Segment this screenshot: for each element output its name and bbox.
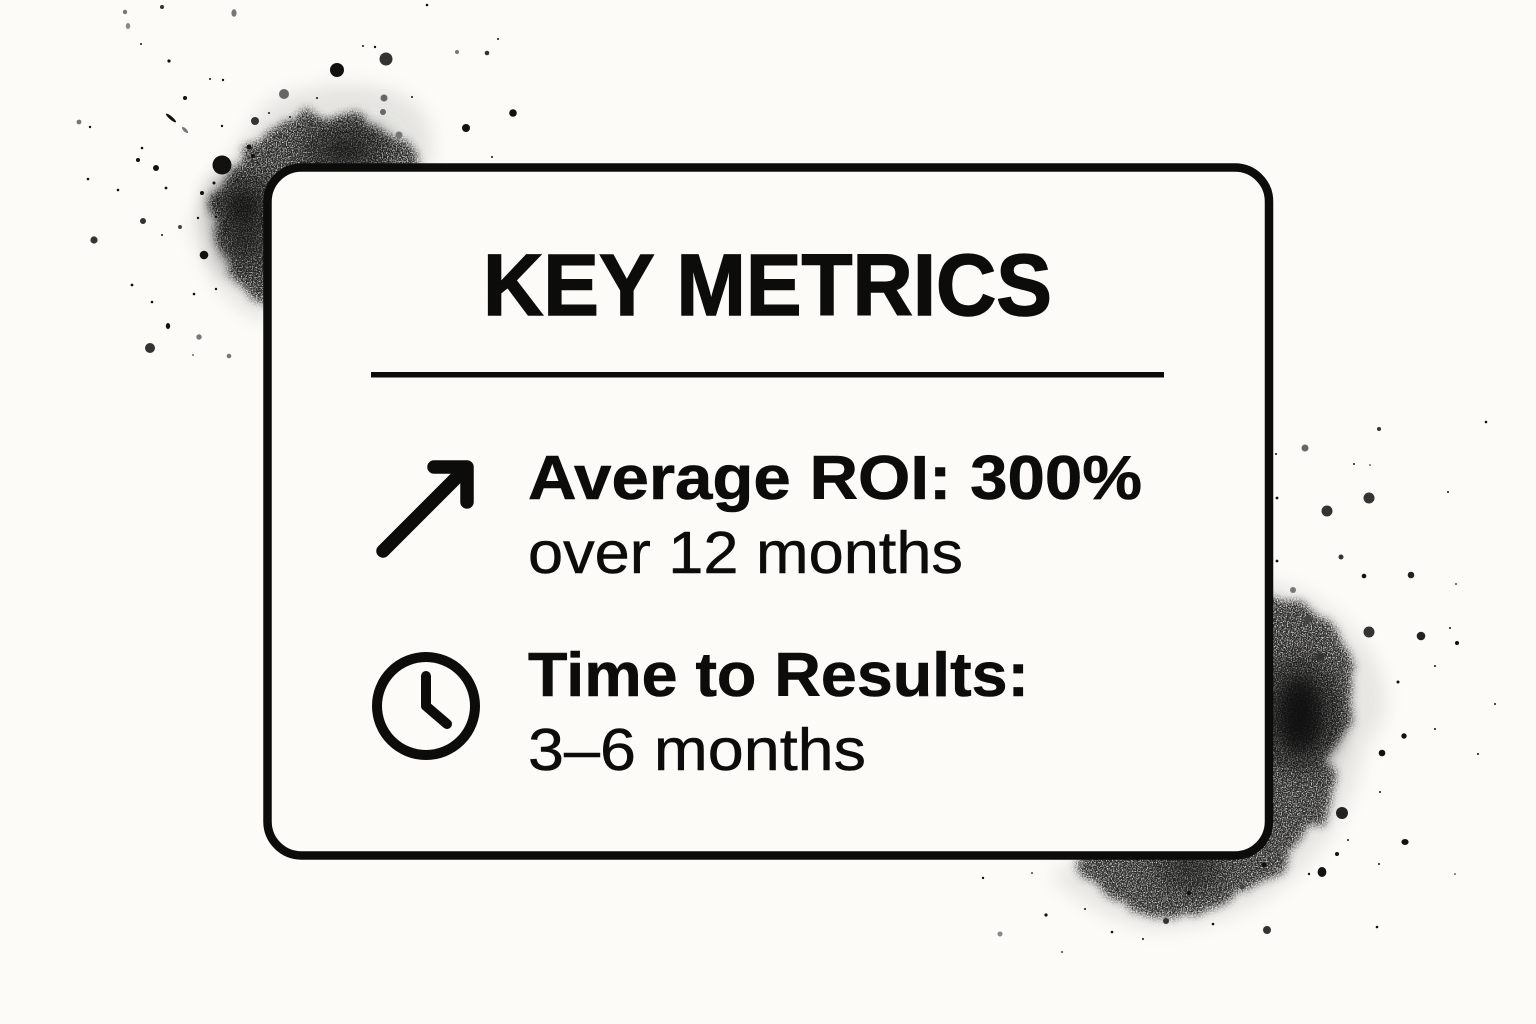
heading: KEY METRICS (483, 237, 1052, 334)
metric: time to results (528, 641, 1029, 783)
ink splatter: bottom right (982, 421, 1496, 953)
metric: average ROI (528, 444, 1142, 586)
card panel (268, 168, 1269, 856)
metric: average ROI: Average ROI: 300% (528, 444, 1142, 513)
icon: upward arrow (383, 467, 467, 551)
heading divider (371, 372, 1164, 378)
metric: average ROI: over 12 months (528, 520, 963, 586)
icon: clock (377, 657, 475, 755)
metric: time to results: Time to Results: (528, 641, 1029, 710)
ink splatter: top left (77, 4, 517, 358)
metric: time to results: 3–6 months (528, 717, 866, 783)
